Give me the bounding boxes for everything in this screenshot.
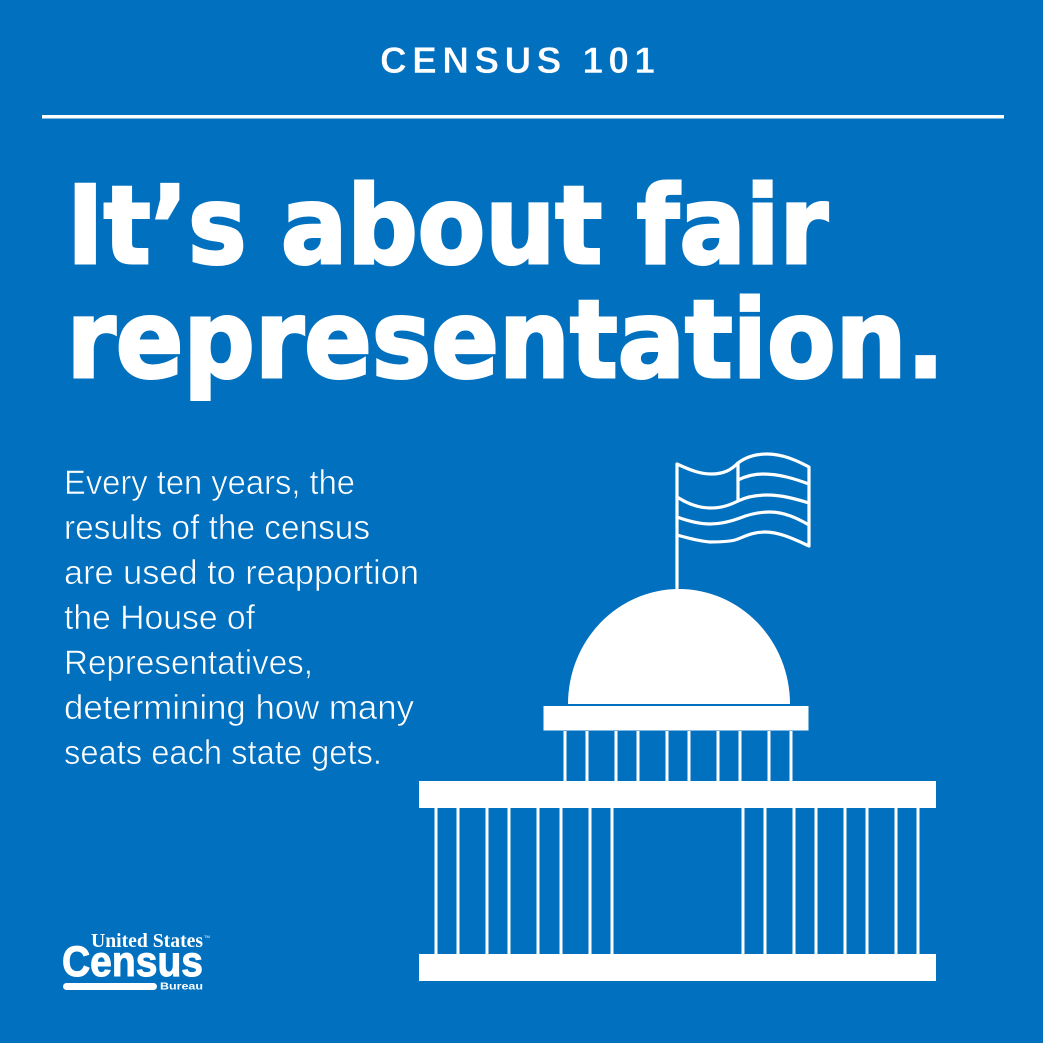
body text block: the House of [64, 599, 256, 637]
logo: United States Census Bureau: Bureau [160, 980, 203, 992]
icon: flag [677, 454, 809, 588]
body text block: determining how many [64, 689, 414, 727]
eyebrow heading: Census 101: CENSUS 101 [380, 40, 655, 81]
lower columns [436, 808, 918, 954]
main headline: It’s about fair [67, 164, 828, 289]
logo: United States Census Bureau: Census [62, 938, 203, 986]
building base [419, 954, 936, 981]
body text block: are used to reapportion [64, 554, 419, 592]
main headline [66, 164, 944, 403]
logo: United States Census Bureau: TM [204, 934, 210, 939]
body text block: Every ten years, the [64, 464, 355, 502]
upper columns [565, 731, 791, 781]
main headline: representation. [66, 278, 944, 403]
body text block: Representatives, [64, 644, 313, 682]
body text block: results of the census [64, 509, 370, 547]
body text block: seats each state gets. [64, 734, 382, 772]
icon: capitol building with flag [419, 454, 936, 981]
icon: dome [568, 589, 790, 704]
body text block [64, 464, 419, 772]
main entablature [419, 781, 936, 808]
logo: United States Census Bureau: United States [91, 930, 203, 952]
upper entablature [544, 706, 808, 730]
